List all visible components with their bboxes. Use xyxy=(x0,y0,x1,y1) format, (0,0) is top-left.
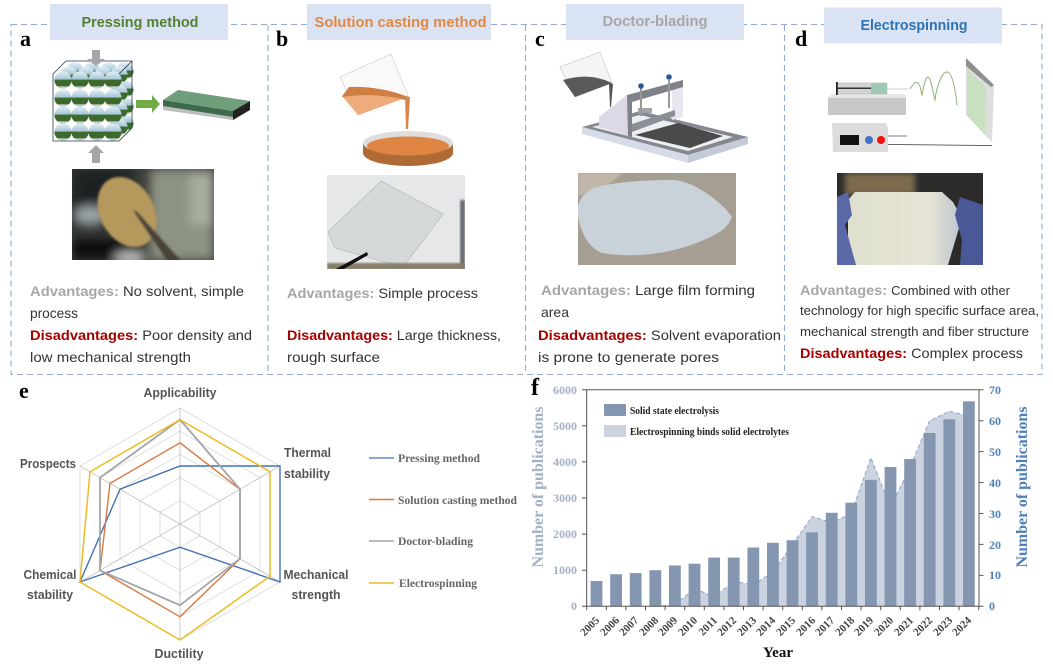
year labels: 2014 xyxy=(754,614,778,639)
radar legend: Solution casting method xyxy=(398,495,518,507)
icon: doctor blade coater xyxy=(560,52,748,163)
panel: doctor-blading xyxy=(535,4,781,365)
radar axis labels xyxy=(20,385,348,661)
radar axis labels: strength xyxy=(292,587,341,602)
text: electrospinning advantages and disadvantages: Advantages: Combined with other xyxy=(800,282,1010,298)
chart legend: Electrospinning binds solid electrolytes xyxy=(630,427,789,438)
year labels: 2010 xyxy=(676,614,700,639)
chart legend: Solid state electrolysis xyxy=(630,406,719,417)
left axis tick labels: 6000 xyxy=(553,383,577,397)
radar axis labels: Prospects xyxy=(20,456,76,471)
dashed frame around panels a to d xyxy=(11,24,1042,374)
icon: pressed pellet slab xyxy=(163,90,250,120)
right axis tick labels: 0 xyxy=(989,599,995,613)
text: pressing advantages and disadvantages xyxy=(30,283,252,365)
text: solution casting advantages and disadvantages: Disadvantages: Large thickness, xyxy=(287,327,501,343)
year labels: 2009 xyxy=(656,614,680,639)
text: doctor-blading advantages and disadvantages: is prone to generate pores xyxy=(538,349,719,365)
right axis tick labels: 70 xyxy=(989,383,1001,397)
text: doctor-blading advantages and disadvantages: Advantages: Large film forming xyxy=(541,282,755,298)
text: pressing advantages and disadvantages: process xyxy=(30,305,78,321)
chart axes xyxy=(582,390,984,610)
radar axis labels: Applicability xyxy=(144,385,217,400)
icon: sphere cube being pressed xyxy=(53,50,134,163)
year labels: 2016 xyxy=(794,614,818,639)
heading: electrospinning xyxy=(824,8,1002,44)
year labels xyxy=(578,614,974,639)
photo: transparent film with tweezers xyxy=(327,175,465,270)
photo: nanofiber membrane held in gloved hands xyxy=(837,173,983,265)
year labels: 2006 xyxy=(598,614,622,639)
text: doctor-blading advantages and disadvantages: area xyxy=(541,304,569,320)
year labels: 2021 xyxy=(892,615,916,639)
year labels: 2012 xyxy=(715,614,739,639)
x axis title: Year xyxy=(763,645,793,661)
year labels: 2018 xyxy=(833,614,857,639)
text: electrospinning advantages and disadvantages: Disadvantages: Complex process xyxy=(800,345,1023,361)
left axis tick labels: 5000 xyxy=(553,419,577,433)
text: pressing advantages and disadvantages: Disadvantages: Poor density and xyxy=(30,327,252,343)
photo: white film on beige background xyxy=(578,173,736,265)
area: electrospinning publications xyxy=(655,411,969,606)
panel letter a: a xyxy=(20,26,31,51)
left axis tick labels: 1000 xyxy=(553,563,577,577)
text: doctor-blading advantages and disadvantages xyxy=(538,282,781,365)
radar legend: Pressing method xyxy=(398,453,481,465)
radar axis labels: Ductility xyxy=(154,646,204,661)
heading: pressing method: Pressing method xyxy=(82,14,198,31)
chart legend xyxy=(604,404,789,438)
left axis tick labels: 2000 xyxy=(553,527,577,541)
series: doctor-blading xyxy=(100,420,240,605)
radar axis labels: stability xyxy=(27,587,74,602)
panel letter b: b xyxy=(276,26,288,51)
panel letter d: d xyxy=(795,26,807,51)
heading: solution casting method xyxy=(307,4,491,40)
right axis tick labels: 40 xyxy=(989,476,1001,490)
year labels: 2024 xyxy=(950,614,974,639)
text: doctor-blading advantages and disadvantages: Disadvantages: Solvent evaporation xyxy=(538,327,781,343)
left axis tick labels: 3000 xyxy=(553,491,577,505)
panel letter c: c xyxy=(535,26,545,51)
heading: solution casting method: Solution casting method xyxy=(314,14,486,31)
text: pressing advantages and disadvantages: low mechanical strength xyxy=(30,349,191,365)
text: pressing advantages and disadvantages: Advantages: No solvent, simple xyxy=(30,283,244,299)
text: electrospinning advantages and disadvantages: mechanical strength and fiber structure xyxy=(800,325,1029,339)
year labels: 2023 xyxy=(931,614,955,639)
series: electrospinning xyxy=(80,420,270,640)
year labels: 2017 xyxy=(813,614,837,639)
panel: pressing method xyxy=(20,4,252,365)
right axis tick labels: 20 xyxy=(989,538,1001,552)
radar chart panel xyxy=(19,378,518,661)
radar legend: Electrospinning xyxy=(399,578,477,590)
icon: beaker pouring into dish xyxy=(340,54,453,166)
panel: solution casting method xyxy=(276,4,501,365)
text: solution casting advantages and disadvantages: rough surface xyxy=(287,349,380,365)
panel letter f: f xyxy=(531,375,540,401)
right axis tick labels: 50 xyxy=(989,445,1001,459)
radar axis labels: stability xyxy=(284,466,331,481)
radar legend xyxy=(369,453,518,590)
year labels: 2013 xyxy=(735,614,759,639)
series: pressing method xyxy=(80,466,280,582)
text: solution casting advantages and disadvantages xyxy=(287,285,501,365)
right axis tick labels: 60 xyxy=(989,414,1001,428)
year labels: 2011 xyxy=(696,615,720,638)
panel letter e: e xyxy=(19,378,29,403)
radar axis labels: Chemical xyxy=(24,567,76,582)
series: solution casting method xyxy=(100,443,240,617)
photo: pressed tan disc held by tweezers xyxy=(72,167,214,264)
panel: electrospinning xyxy=(795,8,1039,361)
heading: electrospinning: Electrospinning xyxy=(860,17,968,34)
year labels: 2022 xyxy=(911,614,935,639)
right axis tick labels: 30 xyxy=(989,507,1001,521)
year labels: 2008 xyxy=(637,614,661,639)
year labels: 2020 xyxy=(872,614,896,639)
year labels: 2019 xyxy=(852,614,876,639)
left axis tick labels: 0 xyxy=(571,599,577,613)
left axis title: Number of publications xyxy=(530,406,547,568)
year labels: 2005 xyxy=(578,614,602,639)
radar axis labels: Thermal xyxy=(284,445,331,460)
left axis tick labels: 4000 xyxy=(553,455,577,469)
text: electrospinning advantages and disadvantages: technology for high specific surface area, xyxy=(800,304,1039,318)
right axis title: Number of publications xyxy=(1014,406,1031,568)
arrow: pressing direction xyxy=(136,95,160,113)
radar axis labels: Mechanical xyxy=(284,567,348,582)
text: solution casting advantages and disadvantages: Advantages: Simple process xyxy=(287,285,478,301)
text: electrospinning advantages and disadvantages xyxy=(800,282,1039,361)
heading: pressing method xyxy=(50,4,228,40)
year labels: 2007 xyxy=(617,614,641,639)
icon: electrospinning setup xyxy=(828,58,994,152)
left axis tick labels xyxy=(553,383,577,613)
right axis tick labels: 10 xyxy=(989,568,1001,582)
radar legend: Doctor-blading xyxy=(398,536,473,548)
heading: doctor-blading xyxy=(566,4,744,40)
right axis tick labels xyxy=(989,383,1001,613)
publications chart panel xyxy=(530,375,1031,661)
year labels: 2015 xyxy=(774,614,798,639)
heading: doctor-blading: Doctor-blading xyxy=(602,13,708,30)
bars: solid state electrolysis publications xyxy=(591,401,975,606)
